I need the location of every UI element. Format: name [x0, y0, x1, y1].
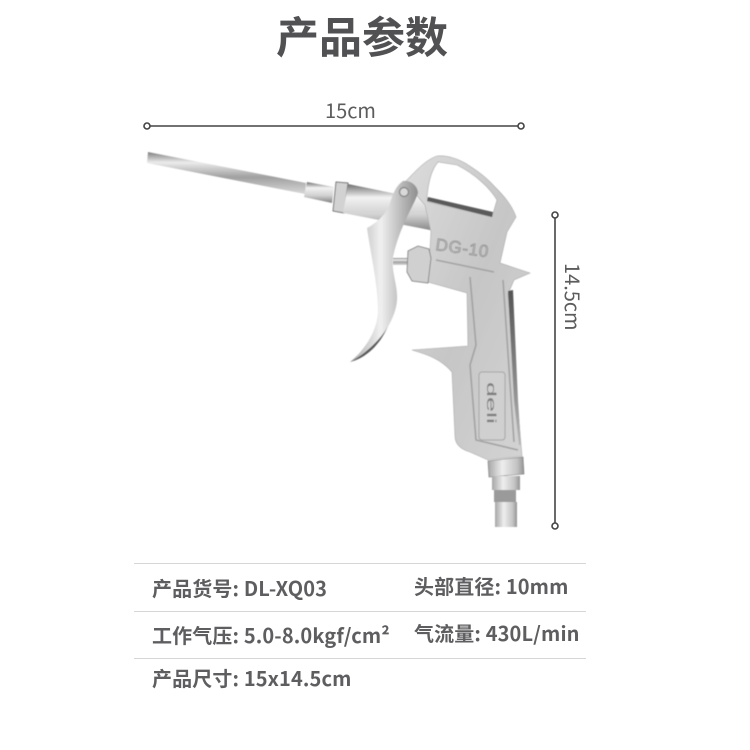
hose tail: [495, 502, 517, 527]
handle and loop body: [405, 156, 530, 460]
width dimension line: [144, 123, 524, 129]
height dimension line: [552, 212, 558, 529]
hex nut: [333, 182, 348, 213]
title: 产品参数: [276, 4, 448, 66]
body ridge: [436, 260, 518, 450]
spec: head diameter: 头部直径: 10mm: [414, 571, 568, 600]
handle shadow strip: [508, 290, 521, 445]
brand plate: [479, 372, 505, 440]
spec: item number: 产品货号: DL-XQ03: [152, 573, 327, 602]
spec: working pressure: 工作气压: 5.0-8.0kgf/cm²: [152, 620, 390, 649]
nozzle tube: [147, 152, 306, 194]
air blow gun: [147, 152, 530, 527]
width label: 15cm: [325, 95, 376, 124]
spec: air flow: 气流量: 430L/min: [414, 618, 580, 647]
loop inner bar: [427, 197, 493, 217]
spec: size: 产品尺寸: 15x14.5cm: [152, 663, 352, 692]
valve pin: [393, 258, 409, 265]
barrel: [343, 184, 445, 232]
brand plate: deli: [484, 382, 499, 424]
nozzle collar: [304, 182, 334, 203]
height label: 14.5cm: [559, 263, 588, 331]
trigger dark edge: [350, 326, 388, 362]
trigger pivot: [400, 188, 408, 196]
hose waist: [494, 490, 516, 502]
hose hex fitting: [488, 457, 524, 477]
valve nut: [407, 246, 431, 283]
trigger: [350, 181, 418, 362]
hose plug: [492, 476, 520, 490]
model engraving: DG-10: [434, 235, 490, 261]
